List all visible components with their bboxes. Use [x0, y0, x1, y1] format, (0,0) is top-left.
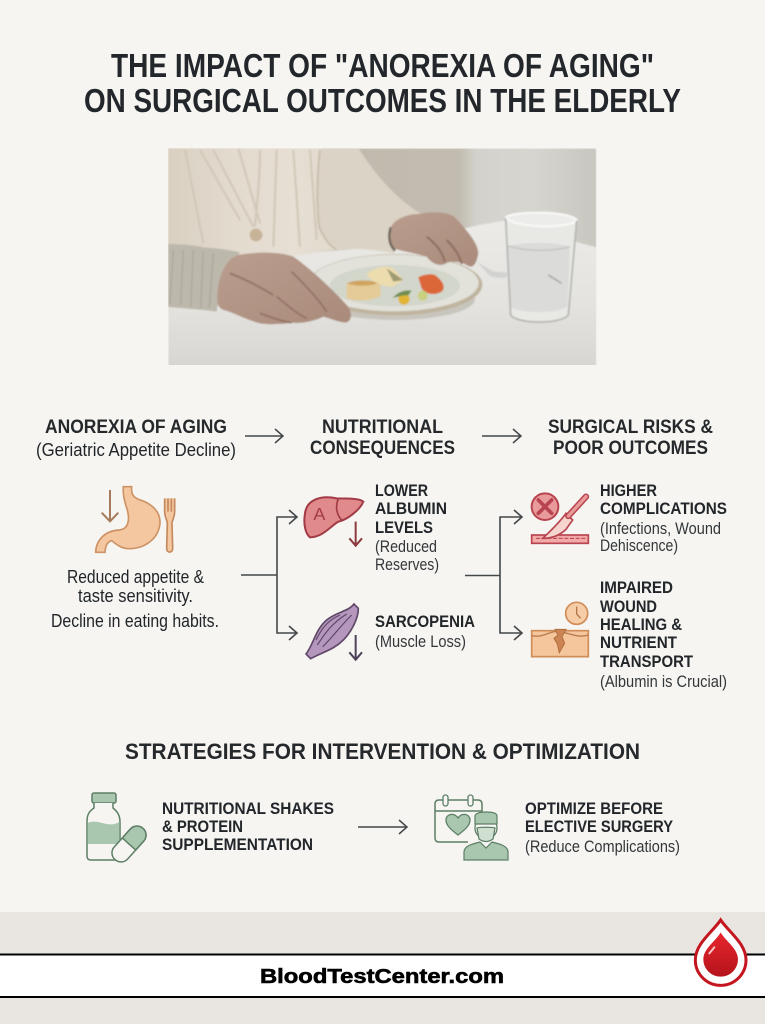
arrow: shakes to optimization: [358, 820, 407, 834]
text: lower albumin levels: [375, 482, 447, 574]
icon: scalpel, incision and warning cross: [532, 493, 588, 543]
text: lower albumin levels: ALBUMIN: [375, 500, 447, 518]
text: impaired wound healing: WOUND: [600, 598, 657, 616]
icon: calendar with heart and surgeon: [435, 795, 508, 860]
text: lower albumin levels: LOWER: [375, 482, 428, 500]
text: impaired wound healing: NUTRIENT: [600, 634, 677, 652]
text: sarcopenia: SARCOPENIA: [375, 613, 475, 631]
icon: liver with letter A and down arrow: A: [313, 504, 325, 524]
text: higher complications: [600, 482, 727, 555]
text: nutritional shakes: SUPPLEMENTATION: [162, 836, 313, 854]
title: [84, 47, 681, 119]
icon: blood drop logo: [695, 920, 746, 985]
icon: shake bottle and capsule: [87, 793, 150, 866]
connector: nutritional consequences to surgical risks: [465, 510, 522, 640]
text: higher complications: Dehiscence): [600, 536, 678, 555]
connector: appetite to nutritional consequences: [241, 510, 297, 640]
heading: strategies: STRATEGIES FOR INTERVENTION & OPTIMIZATION: [125, 739, 640, 764]
text: higher complications: HIGHER: [600, 482, 657, 500]
icon: muscle with down arrow: [306, 604, 362, 660]
icon: wound with clock: [532, 602, 588, 657]
icon: liver with letter A and down arrow: [304, 497, 363, 546]
photo: elderly hands beside a small meal and a glass of water: [165, 145, 597, 367]
column heading: surgical risks: [548, 417, 713, 459]
column heading: surgical risks: SURGICAL RISKS &: [548, 417, 713, 438]
text: nutritional shakes: & PROTEIN: [162, 818, 243, 836]
text: appetite description: taste sensitivity.: [78, 586, 193, 606]
text: higher complications: COMPLICATIONS: [600, 500, 727, 518]
column heading: nutritional consequences: [310, 417, 455, 459]
column heading: surgical risks: POOR OUTCOMES: [553, 438, 708, 459]
text: appetite description: Decline in eating habits.: [51, 611, 219, 631]
text: sarcopenia: [375, 613, 475, 651]
text: lower albumin levels: (Reduced: [375, 537, 437, 556]
text: higher complications: (Infections, Wound: [600, 519, 721, 538]
text: optimize before elective surgery: OPTIMIZE BEFORE: [525, 800, 663, 818]
column heading: nutritional consequences: CONSEQUENCES: [310, 438, 455, 459]
text: impaired wound healing: IMPAIRED: [600, 579, 673, 597]
text: nutritional shakes: [162, 800, 334, 854]
arrow: heading two to heading three: [482, 429, 521, 443]
column heading: nutritional consequences: NUTRITIONAL: [322, 417, 443, 438]
footer band: BloodTestCenter.com: [260, 966, 504, 988]
text: optimize before elective surgery: [525, 800, 680, 856]
text: sarcopenia: (Muscle Loss): [375, 632, 466, 651]
text: appetite description: [51, 567, 219, 631]
text: appetite description: Reduced appetite &: [67, 567, 204, 587]
column heading: anorexia of aging: ANOREXIA OF AGING: [45, 417, 227, 438]
column heading: anorexia of aging: [36, 417, 236, 460]
title: THE IMPACT OF "ANOREXIA OF AGING": [111, 47, 654, 84]
footer band: [0, 912, 765, 1024]
text: optimize before elective surgery: ELECTIVE SURGERY: [525, 818, 673, 836]
text: lower albumin levels: LEVELS: [375, 519, 433, 537]
text: impaired wound healing: [600, 579, 727, 691]
text: impaired wound healing: TRANSPORT: [600, 653, 693, 671]
text: lower albumin levels: Reserves): [375, 555, 439, 574]
text: impaired wound healing: HEALING &: [600, 616, 682, 634]
icon: stomach with down arrow and fork: [96, 487, 175, 552]
text: optimize before elective surgery: (Reduce Complications): [525, 837, 680, 856]
arrow: heading one to heading two: [245, 429, 283, 443]
text: nutritional shakes: NUTRITIONAL SHAKES: [162, 800, 334, 818]
column heading: anorexia of aging: (Geriatric Appetite Decline): [36, 440, 236, 460]
text: impaired wound healing: (Albumin is Crucial): [600, 672, 727, 691]
